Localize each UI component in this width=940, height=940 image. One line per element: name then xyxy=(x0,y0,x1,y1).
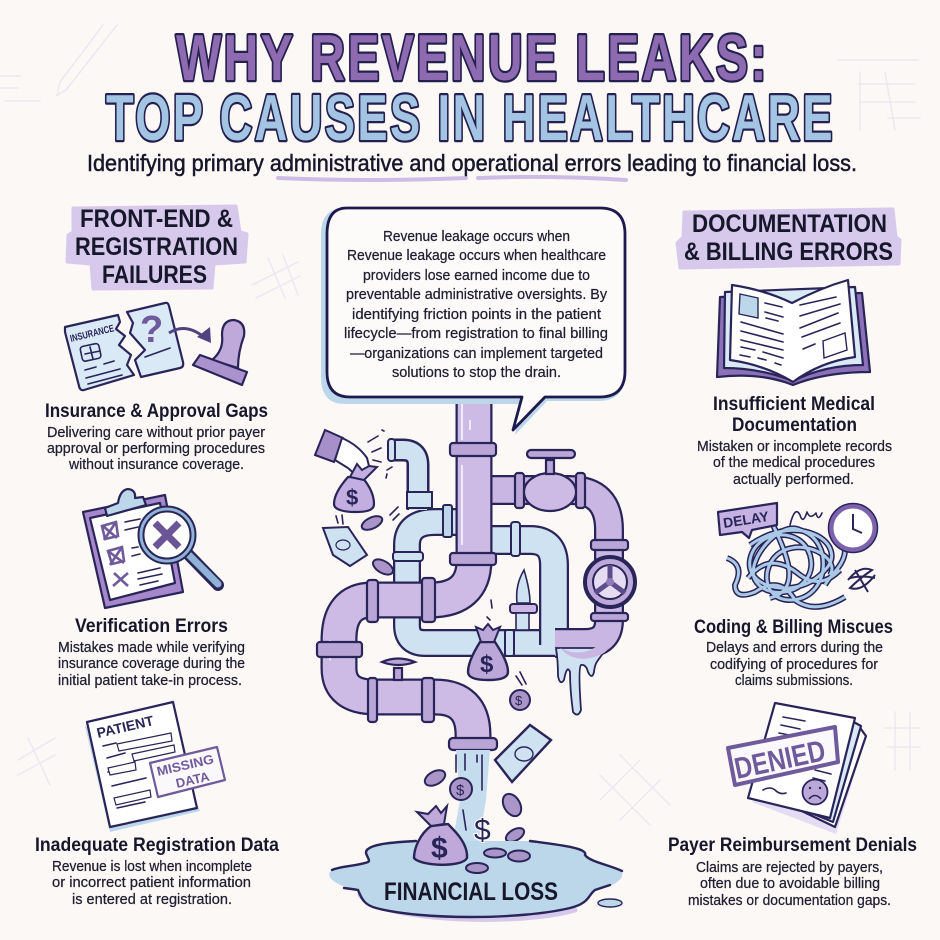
icon: patient form with missing data stamp: MISSING xyxy=(155,751,215,779)
icon: tangled wires, delay sign and clock: DELAY xyxy=(722,508,771,531)
icon: dripping leak xyxy=(556,636,612,715)
item: insurance and approval gaps: approval or performing procedures xyxy=(47,441,265,457)
item: insufficient medical documentation: Mistaken or incomplete records xyxy=(697,439,892,455)
icon: falling bill and coins at outlet xyxy=(422,725,551,845)
item: inadequate registration data xyxy=(35,834,279,908)
heading: front-end: REGISTRATION xyxy=(75,233,238,261)
chart: leaking pipe system xyxy=(315,398,635,919)
item: coding and billing miscues xyxy=(694,616,893,689)
item: inadequate registration data: Inadequate Registration Data xyxy=(35,834,279,856)
icon: denied documents xyxy=(728,703,866,834)
item: inadequate registration data: is entered at registration. xyxy=(72,892,232,908)
title xyxy=(106,21,835,154)
item: payer reimbursement denials: often due to avoidable billing xyxy=(700,876,880,892)
item: insurance and approval gaps: Insurance & Approval Gaps xyxy=(45,400,268,422)
puddle xyxy=(329,841,622,919)
icon: money bag on pipe: $ xyxy=(480,651,494,678)
item: verification errors: initial patient take-in process. xyxy=(58,673,242,689)
item: coding and billing miscues: codifying of procedures for xyxy=(710,657,878,673)
icon: money bag on pipe xyxy=(468,624,508,680)
item: verification errors: Verification Errors xyxy=(75,615,228,637)
heading: front-end: FAILURES xyxy=(102,261,207,289)
item: coding and billing miscues: claims submissions. xyxy=(735,673,853,689)
heading: documentation: DOCUMENTATION xyxy=(692,210,887,238)
item: payer reimbursement denials: Claims are rejected by payers, xyxy=(696,860,883,876)
icon: dollar sign and coins in puddle: $ xyxy=(474,814,491,847)
heading: front-end xyxy=(67,205,247,289)
icon: money bag in puddle xyxy=(414,806,467,865)
icon: torn insurance card and stamp xyxy=(65,303,247,390)
callout: revenue leakage explanation: providers lose earned income due to xyxy=(363,267,590,284)
icon: patient form with missing data stamp xyxy=(85,702,225,832)
icon: spout with flame-shaped leak xyxy=(510,570,537,630)
water stream xyxy=(452,750,490,845)
icon: denied documents: DENIED xyxy=(732,734,828,786)
blue pipes xyxy=(388,439,570,656)
panel: documentation and billing errors xyxy=(668,209,917,909)
icon: hand dropping money bag: $ xyxy=(346,485,358,510)
item: insurance and approval gaps: Delivering care without prior payer xyxy=(47,425,265,441)
icon: falling bills and coins: $ xyxy=(515,693,523,708)
item: verification errors xyxy=(58,615,245,689)
callout: revenue leakage explanation: Revenue leakage occurs when healthcare xyxy=(347,247,606,264)
icon: tangled wires, delay sign and clock xyxy=(718,503,878,607)
item: insurance and approval gaps: without insurance coverage. xyxy=(68,457,244,473)
item: insufficient medical documentation: actually performed. xyxy=(733,472,854,488)
icon: dollar sign and coins in puddle xyxy=(466,814,530,873)
item: payer reimbursement denials xyxy=(668,834,917,909)
icon: hand dropping money bag xyxy=(315,430,392,512)
callout: revenue leakage explanation: solutions to stop the drain. xyxy=(392,364,561,381)
heading: documentation: & BILLING ERRORS xyxy=(684,238,893,266)
icon: falling bills and coins xyxy=(323,507,530,710)
item: coding and billing miscues: Coding & Billing Miscues xyxy=(694,616,893,638)
item: insufficient medical documentation xyxy=(697,393,892,488)
icon: falling bill and coins at outlet: $ xyxy=(456,782,465,799)
callout: revenue leakage explanation: Revenue leakage occurs when xyxy=(383,228,570,245)
label: financial loss: FINANCIAL LOSS xyxy=(384,878,558,906)
item: insurance and approval gaps xyxy=(45,400,268,473)
item: insufficient medical documentation: Insufficient Medical xyxy=(713,393,875,415)
icon: clipboard and magnifier xyxy=(83,489,218,608)
panel: front-end and registration failures xyxy=(35,205,279,908)
icon: open book xyxy=(717,280,870,385)
pipe flanges and valves xyxy=(317,443,628,750)
icon: valve wheel xyxy=(585,557,635,607)
icon: patient form with missing data stamp: PATIENT xyxy=(95,712,156,741)
item: payer reimbursement denials: mistakes or documentation gaps. xyxy=(688,893,891,909)
icon: torn insurance card and stamp: ? xyxy=(140,309,163,351)
callout: revenue leakage explanation: identifying friction points in the patient xyxy=(352,306,602,323)
icon: patient form with missing data stamp: DATA xyxy=(174,769,211,791)
item: insufficient medical documentation: Documentation xyxy=(732,414,857,436)
heading: front-end: FRONT-END & xyxy=(80,205,233,233)
item: verification errors: insurance coverage during the xyxy=(58,656,245,672)
callout: revenue leakage explanation: —organizations can implement targeted xyxy=(350,345,603,362)
heading: documentation xyxy=(677,209,900,268)
item: verification errors: Mistakes made while verifying xyxy=(58,640,245,656)
purple pipes xyxy=(330,398,609,745)
callout: revenue leakage explanation xyxy=(321,208,625,435)
item: inadequate registration data: Revenue is lost when incomplete xyxy=(52,859,252,875)
item: coding and billing miscues: Delays and errors during the xyxy=(706,640,883,656)
item: inadequate registration data: or incorrect patient information xyxy=(52,875,251,891)
callout: revenue leakage explanation: lifecycle—from registration to final billing xyxy=(344,325,608,342)
callout: revenue leakage explanation: preventable administrative oversights. By xyxy=(346,286,607,303)
item: insufficient medical documentation: of the medical procedures xyxy=(713,455,875,471)
icon: torn insurance card and stamp: INSURANCE xyxy=(69,323,116,345)
subtitle: Identifying primary administrative and operational errors leading to financial loss. xyxy=(87,150,857,176)
icon: money bag in puddle: $ xyxy=(431,832,448,865)
